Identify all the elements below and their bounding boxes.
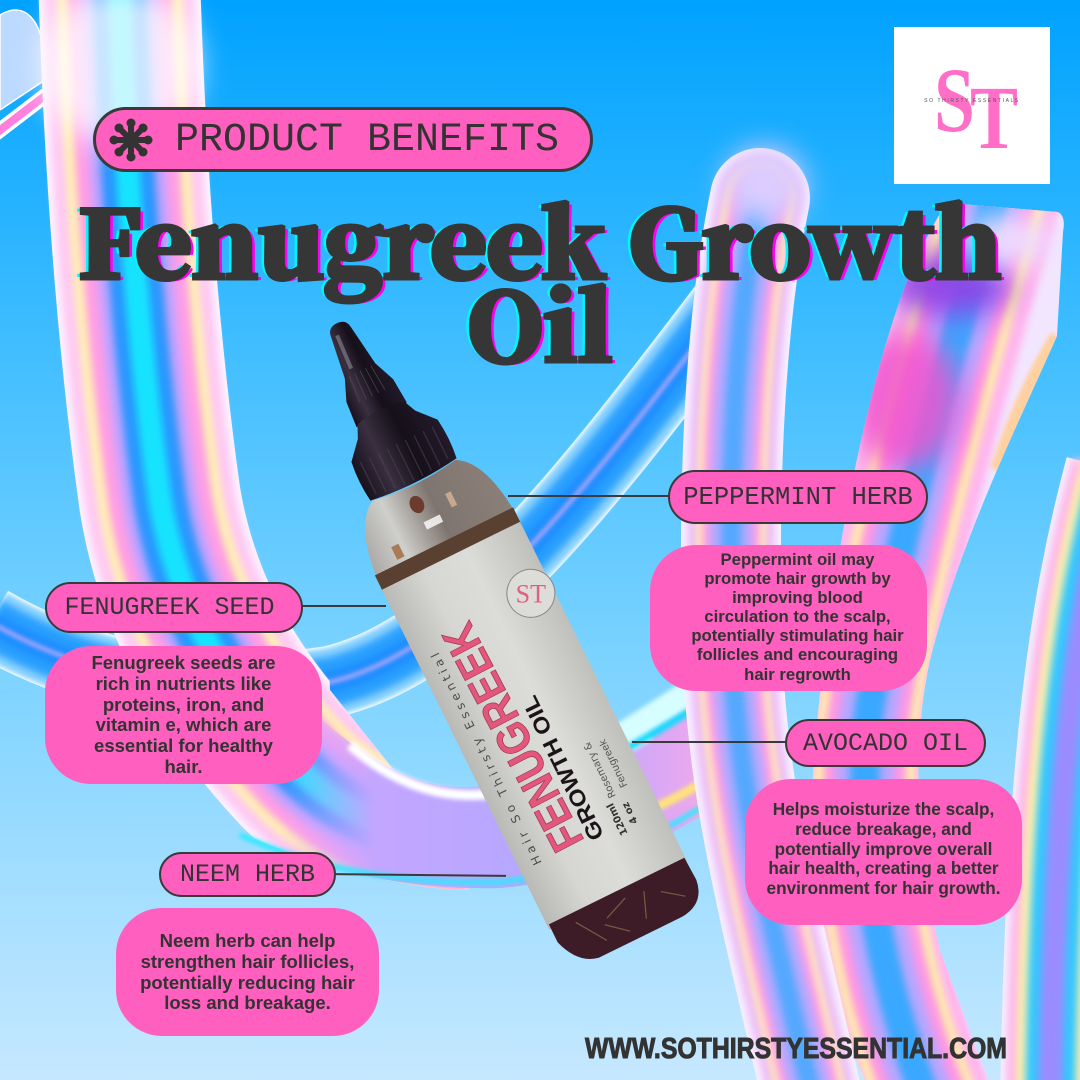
text: fenugreek bbox=[45, 646, 322, 784]
label: neem herb: NEEM HERB bbox=[180, 860, 315, 889]
bottle nozzle bbox=[312, 311, 407, 427]
title line 1: Fenugreek Growth bbox=[79, 173, 1001, 305]
connector: peppermint bbox=[508, 495, 670, 497]
bottle tagline: Hair So Thirsty Essential bbox=[428, 650, 545, 867]
label: fenugreek seed bbox=[45, 582, 303, 633]
cap ribs bbox=[360, 427, 450, 498]
logo box bbox=[894, 27, 1050, 184]
ribbon: blue sweep bbox=[0, 280, 745, 688]
text: fenugreek: rich in nutrients like bbox=[96, 673, 271, 694]
bottle herb line bbox=[375, 507, 522, 593]
text: avocado: potentially improve overall bbox=[775, 839, 992, 859]
text: peppermint: circulation to the scalp, bbox=[704, 607, 891, 626]
text: peppermint: potentially stimulating hair bbox=[691, 626, 904, 645]
text: avocado: Helps moisturize the scalp, bbox=[773, 799, 994, 819]
text: peppermint: improving blood bbox=[732, 588, 863, 607]
label: peppermint herb bbox=[668, 470, 928, 524]
bottle: Fenugreek bbox=[597, 737, 630, 789]
text: peppermint: follicles and encouraging bbox=[697, 645, 898, 664]
text: neem: potentially reducing hair bbox=[140, 972, 355, 993]
bottle name: FENUGREEK bbox=[432, 615, 594, 860]
ribbon: top-left corner bbox=[0, 10, 46, 134]
glass contents bbox=[375, 481, 467, 560]
base herbs bbox=[576, 874, 689, 951]
text: avocado: environment for hair growth. bbox=[767, 878, 1000, 898]
ribbon: far right band bbox=[1050, 470, 1080, 1080]
text: neem: strengthen hair follicles, bbox=[141, 951, 354, 972]
connector: neem bbox=[334, 873, 506, 877]
text: neem: loss and breakage. bbox=[164, 992, 331, 1013]
title line 2: Oil bbox=[467, 256, 613, 388]
bottle bottom with herbs bbox=[549, 857, 708, 971]
ribbon: right wide band bbox=[812, 204, 1064, 1080]
text: neem: Neem herb can help bbox=[160, 930, 335, 951]
text: fenugreek: essential for healthy bbox=[94, 735, 273, 756]
badge text: PRODUCT BENEFITS bbox=[175, 118, 559, 163]
label: peppermint herb: PEPPERMINT HERB bbox=[683, 482, 913, 512]
label: avocado oil: AVOCADO OIL bbox=[803, 728, 968, 758]
text: fenugreek: vitamin e, which are bbox=[96, 714, 271, 735]
text: peppermint: promote hair growth by bbox=[704, 569, 891, 588]
label: avocado oil bbox=[785, 719, 986, 767]
text: fenugreek: Fenugreek seeds are bbox=[91, 652, 276, 673]
website url: WWW.SOTHIRSTYESSENTIAL.COM bbox=[585, 1033, 1007, 1065]
logo tagline: SO THIRSTY ESSENTIALS bbox=[924, 98, 1020, 104]
nozzle ribs bbox=[329, 327, 385, 402]
label: neem herb bbox=[159, 852, 336, 897]
label: fenugreek seed: FENUGREEK SEED bbox=[64, 593, 275, 622]
ribbon: purple swoosh bbox=[240, 650, 760, 888]
icon: flower bbox=[110, 118, 152, 162]
text: neem bbox=[116, 908, 379, 1036]
bottle brand circle: ST bbox=[516, 579, 546, 608]
bottle: 4 oz bbox=[620, 800, 641, 826]
bottle subtitle: GROWTH OIL bbox=[517, 692, 609, 845]
text: fenugreek: hair. bbox=[164, 756, 203, 777]
bottle bbox=[268, 288, 710, 972]
text: peppermint: Peppermint oil may bbox=[721, 550, 874, 569]
text: peppermint: hair regrowth bbox=[744, 665, 851, 684]
bottle ingredients: Rosemary & bbox=[582, 740, 619, 799]
bottle cap bbox=[335, 388, 459, 504]
bottle glass shoulder bbox=[345, 446, 521, 591]
badge: product benefits bbox=[93, 107, 593, 172]
connector: avocado bbox=[632, 741, 787, 743]
logo S: S bbox=[934, 49, 975, 151]
ribbon: left vertical band bbox=[40, 0, 470, 840]
text: avocado: hair health, creating a better bbox=[768, 858, 999, 878]
logo T: T bbox=[970, 69, 1018, 168]
bottle label bbox=[382, 522, 687, 930]
text: fenugreek: proteins, iron, and bbox=[103, 694, 264, 715]
ribbon: right vertical band with rounded top bbox=[725, 147, 815, 1080]
text: avocado bbox=[745, 779, 1022, 925]
text: peppermint bbox=[650, 545, 927, 691]
connector: fenugreek bbox=[300, 605, 386, 607]
text: avocado: reduce breakage, and bbox=[795, 819, 972, 839]
bottle size: 120ml bbox=[605, 801, 631, 837]
bottle brand circle bbox=[499, 561, 563, 625]
